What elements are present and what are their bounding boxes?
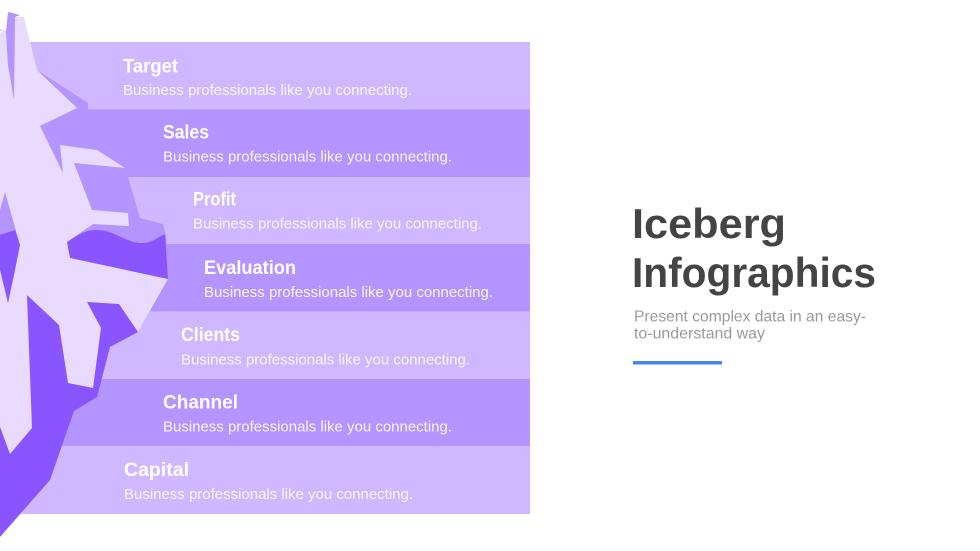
band: Capital (0, 446, 530, 514)
title: Iceberg (632, 200, 786, 247)
band: Evaluation: Evaluation (204, 257, 296, 279)
band: Evaluation (0, 244, 530, 312)
band: Clients: Clients (181, 324, 240, 346)
band: Profit (0, 177, 530, 244)
band: Channel: Channel (163, 392, 238, 414)
subtitle text (634, 308, 866, 342)
band: Channel (0, 379, 530, 446)
subtitle text: to-understand way (634, 326, 765, 342)
band: Clients: Business professionals like you connecting. (181, 352, 470, 368)
band: Profit: Business professionals like you connecting. (193, 216, 482, 232)
accent line (633, 361, 722, 364)
band: Target (0, 42, 530, 110)
band: Channel: Business professionals like you connecting. (163, 418, 452, 436)
band: Capital: Capital (124, 459, 189, 481)
subtitle text: Present complex data in an easy- (634, 308, 866, 326)
band: Profit: Profit (193, 188, 236, 210)
band: Clients (0, 312, 530, 379)
title: Infographics (632, 249, 876, 296)
band: Sales: Business professionals like you connecting. (163, 148, 452, 166)
band: Sales: Sales (163, 122, 209, 144)
panel: layered bands (0, 42, 530, 514)
band: Capital: Business professionals like you connecting. (124, 486, 413, 503)
icon: iceberg (0, 0, 168, 537)
band: Evaluation: Business professionals like you connecting. (204, 284, 493, 301)
title (632, 200, 876, 296)
band: Target: Target (123, 56, 178, 78)
band: Sales (0, 110, 530, 177)
band: Target: Business professionals like you connecting. (123, 82, 412, 99)
